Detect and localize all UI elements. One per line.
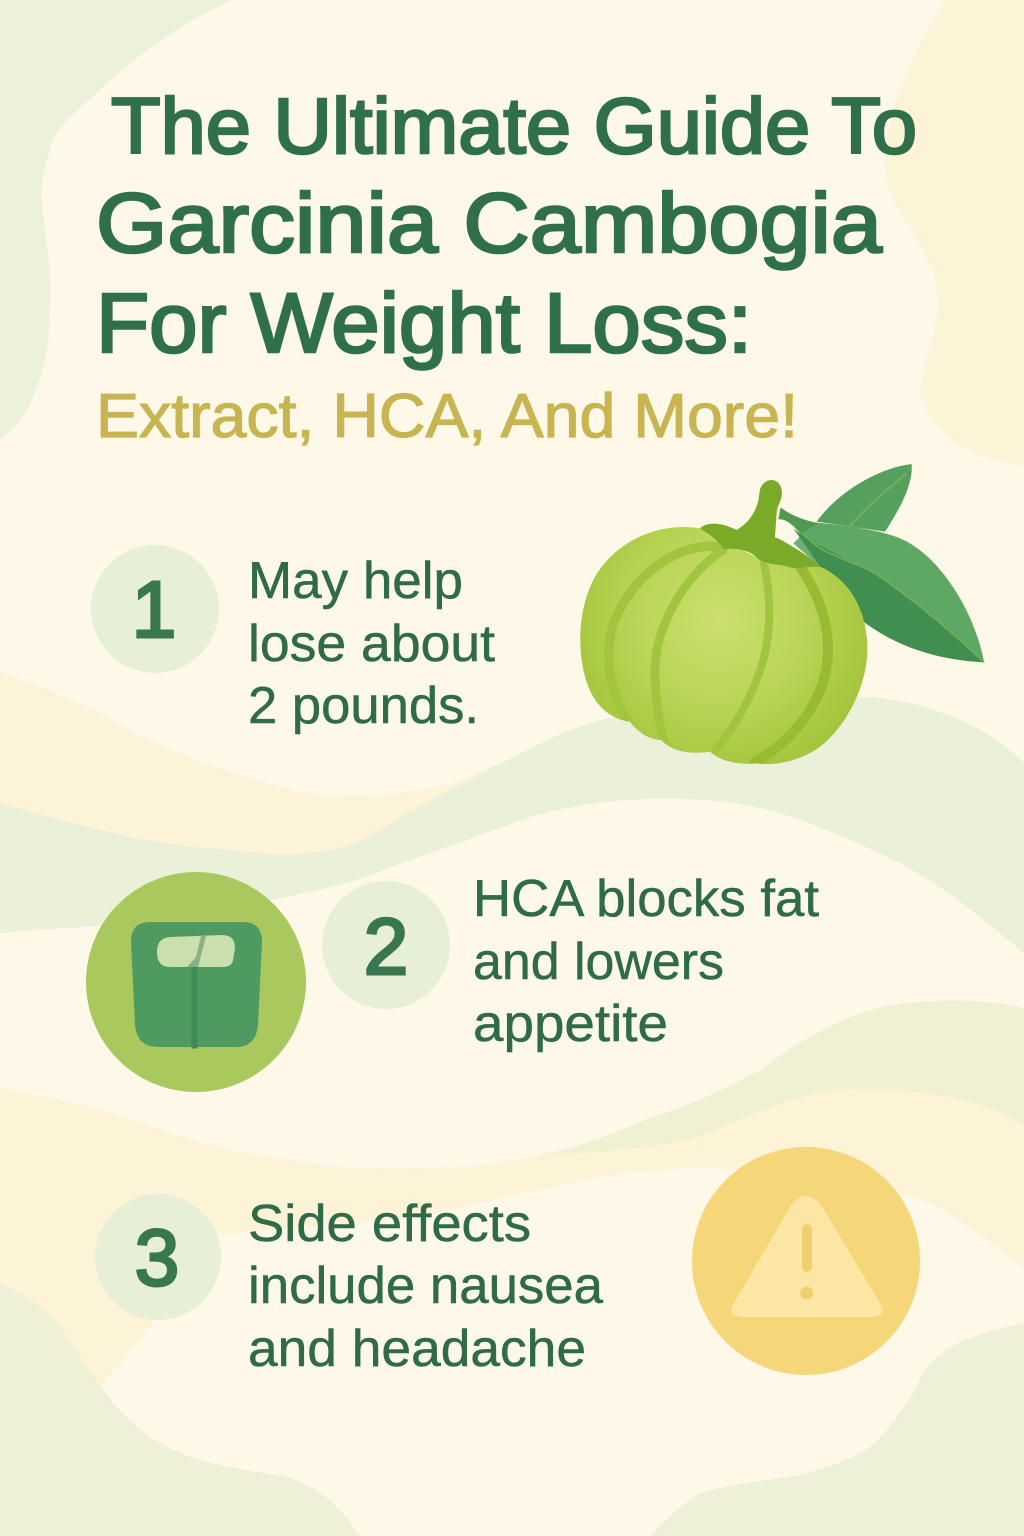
text block: point 2: and lowers (473, 933, 724, 991)
text block: point 1: May help (248, 552, 463, 610)
title: For Weight Loss: (96, 276, 752, 370)
text block: point 2: appetite (473, 995, 668, 1053)
text block: point 2: HCA blocks fat (473, 870, 820, 928)
text block: point 3: and headache (248, 1320, 586, 1378)
text block: point 2 (473, 870, 820, 1053)
icon: garcinia fruit (580, 464, 984, 764)
number badge 1 (91, 545, 219, 673)
number badge 2 (322, 881, 450, 1009)
text block: point 1: lose about (248, 615, 496, 673)
text block: point 3: Side effects (248, 1195, 531, 1253)
icon: warning triangle (692, 1147, 920, 1375)
icon: weighing scale (86, 872, 306, 1092)
title (96, 81, 917, 370)
number badge 1: 1 (132, 565, 176, 654)
text block: point 1 (248, 552, 496, 735)
number badge 2: 2 (364, 902, 408, 991)
subtitle: Extract, HCA, And More! (96, 382, 798, 451)
title: The Ultimate Guide To (111, 81, 917, 170)
number badge 3 (95, 1194, 221, 1320)
title: Garcinia Cambogia (96, 176, 882, 270)
text block: point 3 (248, 1195, 603, 1378)
text block: point 3: include nausea (248, 1257, 603, 1315)
text block: point 1: 2 pounds. (248, 677, 479, 735)
number badge 3: 3 (135, 1213, 179, 1302)
